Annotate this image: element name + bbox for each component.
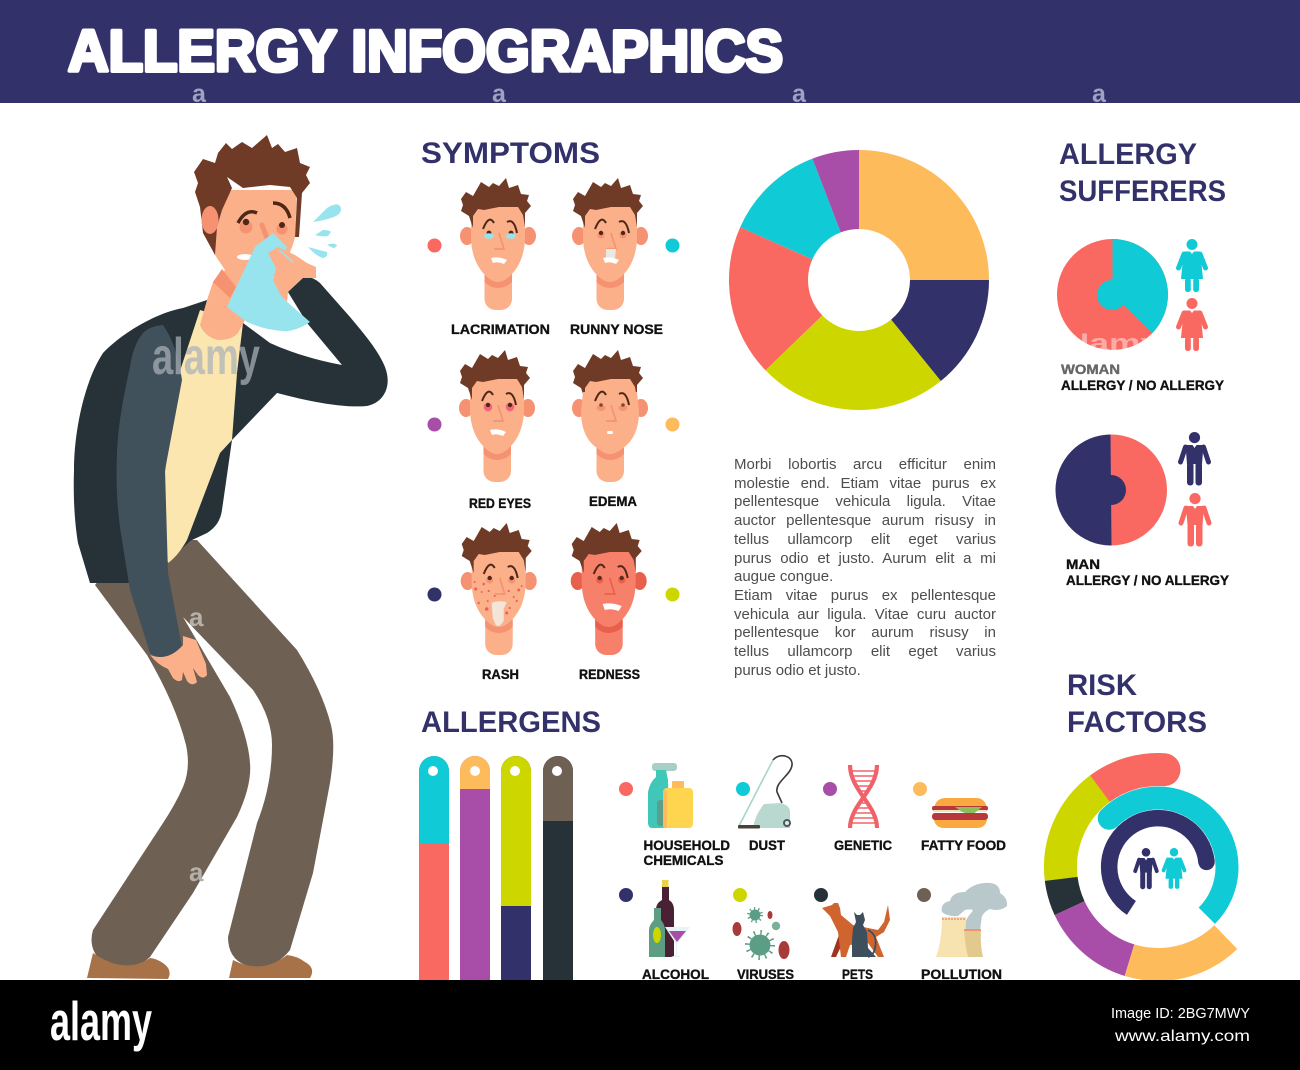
symptom: redness (571, 523, 647, 655)
paragraph text: purus odio et justo. (734, 662, 861, 679)
character eyes and brows (238, 203, 290, 238)
icon: man red (1181, 493, 1209, 546)
label: man allergy: ALLERGY / NO ALLERGY (1066, 573, 1229, 588)
paragraph text: tellus ullamcorp elit eget varius (734, 643, 996, 660)
paragraph text: purus odio et justo. Aurum elit a mi (734, 550, 996, 567)
paragraph text: pellentesque kor aurum risusy in (734, 624, 996, 641)
allergen dot brown (917, 888, 931, 902)
character neck shadow (213, 269, 236, 298)
character left shoe (87, 953, 170, 979)
watermark marks: alamy (1060, 330, 1161, 357)
watermark marks: a (189, 857, 204, 887)
tissue (227, 233, 310, 331)
icon: woman red (1178, 298, 1206, 351)
paragraph text: Morbi lobortis arcu efficitur enim (734, 456, 996, 473)
finger gap (279, 250, 293, 262)
symptom dot navy (428, 588, 442, 602)
label: alcohol: ALCOHOL (642, 967, 709, 982)
label: household chemicals (644, 838, 730, 868)
pie: man allergy (1055, 434, 1167, 546)
symptom: lacrimation (460, 178, 536, 310)
allergen dot lime (733, 888, 747, 902)
icon: pollution (936, 883, 1007, 957)
character face (215, 190, 297, 282)
label: household chemicals: CHEMICALS (644, 853, 724, 868)
icon: vacuum (738, 756, 792, 828)
character mouth (237, 254, 253, 260)
heading: allergy sufferers (1059, 138, 1226, 208)
symptom dot cyan (666, 238, 680, 252)
symptom: red eyes (459, 350, 535, 482)
watermark marks: a (192, 80, 207, 108)
symptom label red eyes: RED EYES (469, 496, 531, 511)
symptom label lacrimation: LACRIMATION (451, 322, 550, 337)
symptom label edema: EDEMA (589, 494, 637, 509)
footer site: www.alamy.com (1114, 1028, 1250, 1045)
paragraph text: augue congue. (734, 568, 833, 585)
icon: pets (822, 903, 890, 957)
allergen dot dark (814, 888, 828, 902)
sneeze droplets (308, 204, 341, 258)
footer image id: Image ID: 2BG7MWY (1111, 1005, 1250, 1022)
radial chart: risk factors (1060, 770, 1227, 964)
character shirt (163, 310, 243, 563)
heading: allergens: ALLERGENS (421, 706, 601, 739)
symptom label runny nose: RUNNY NOSE (570, 322, 663, 337)
label: man allergy: MAN (1066, 557, 1100, 572)
character upper hand (268, 247, 316, 302)
heading: risk factors: RISK (1067, 669, 1137, 702)
paragraph text: Etiam vitae purus ex pellentesque (734, 587, 996, 604)
character: sneezing man (74, 135, 388, 979)
symptom dot lime (666, 588, 680, 602)
character ear (202, 206, 218, 234)
character hanging sleeve (117, 325, 182, 658)
paragraph text: molestie end. Etiam vitae purus ex (734, 475, 996, 492)
heading: risk factors (1067, 669, 1207, 739)
symptom: runny nose (572, 178, 648, 310)
character right shoe (229, 955, 312, 978)
label: household chemicals: HOUSEHOLD (644, 838, 730, 853)
symptom label rash: RASH (482, 667, 519, 682)
paragraph text: pellentesque vehicula ligula. Vitae (734, 493, 996, 510)
paragraph text: tellus ullamcorp elit eget varius (734, 531, 996, 548)
character lower hand (150, 636, 207, 684)
label: man allergy (1066, 557, 1229, 588)
donut chart (729, 150, 989, 410)
symptom: rash (461, 523, 537, 655)
icon: DNA (850, 765, 877, 828)
label: fatty food: FATTY FOOD (921, 838, 1006, 853)
header band (0, 0, 1300, 103)
title: ALLERGY INFOGRAPHICS (68, 19, 783, 84)
character raised sleeve (240, 277, 388, 406)
symptom dot purple (428, 418, 442, 432)
character hair (194, 135, 310, 255)
watermark marks: a (492, 80, 507, 108)
allergen dot red (619, 782, 633, 796)
symptom: edema (572, 350, 648, 482)
watermark marks (152, 80, 1161, 887)
symptom dot orange (666, 418, 680, 432)
allergen dot orange (913, 782, 927, 796)
icon: man navy (1180, 432, 1208, 486)
footer band (0, 980, 1300, 1070)
character neck (200, 268, 275, 340)
label: dust: DUST (749, 838, 786, 853)
bar chart: allergens (419, 756, 573, 980)
symptom dot red (428, 238, 442, 252)
label: woman allergy (1061, 362, 1224, 393)
icon: couple (1135, 848, 1184, 889)
heading: symptoms: SYMPTOMS (421, 137, 600, 170)
character jacket body (74, 300, 277, 583)
paragraph text: auctor pellentesque aurum risusy in (734, 512, 996, 529)
allergen dot navy (619, 888, 633, 902)
label: pets: PETS (842, 967, 873, 982)
allergen dot purple (823, 782, 837, 796)
label: genetic: GENETIC (834, 838, 892, 853)
watermark marks: alamy (152, 328, 260, 386)
label: woman allergy: ALLERGY / NO ALLERGY (1061, 378, 1224, 393)
label: woman allergy: WOMAN (1061, 362, 1120, 377)
label: pollution: POLLUTION (921, 967, 1002, 982)
allergen dot cyan (736, 782, 750, 796)
heading: allergy sufferers: SUFFERERS (1059, 175, 1226, 208)
paragraph text (734, 456, 996, 679)
watermark marks: a (1092, 80, 1107, 108)
icon: viruses (732, 908, 790, 959)
pie: woman allergy (1057, 239, 1168, 350)
heading: allergy sufferers: ALLERGY (1059, 138, 1197, 171)
paragraph text: vehicula aur ligula. Vitae curu auctor (734, 606, 996, 623)
watermark marks: a (792, 80, 807, 108)
icon: woman cyan (1178, 239, 1206, 292)
icon: household chemicals (648, 763, 693, 828)
footer logo: alamy (50, 990, 152, 1052)
character trousers (92, 540, 333, 970)
symptom label redness: REDNESS (579, 667, 640, 682)
icon: alcohol (649, 880, 690, 957)
heading: risk factors: FACTORS (1067, 706, 1207, 739)
icon: burger (932, 798, 988, 828)
watermark marks: a (189, 602, 204, 632)
label: viruses: VIRUSES (737, 967, 794, 982)
